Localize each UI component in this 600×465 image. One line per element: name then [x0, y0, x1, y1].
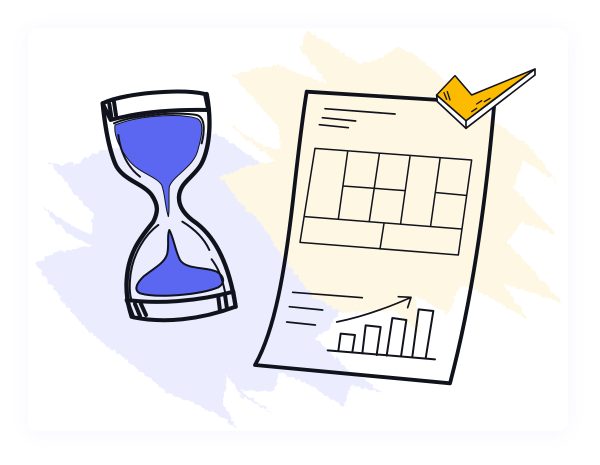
hourglass top sand	[115, 116, 202, 217]
brush stroke: purple	[35, 133, 383, 428]
table	[300, 148, 472, 255]
icon: hourglass	[103, 92, 236, 320]
hourglass top cap	[103, 92, 208, 120]
document bottom text lines and chart	[287, 292, 435, 359]
brush stroke: yellow	[220, 30, 563, 335]
document top text lines and table	[300, 109, 472, 255]
card background	[28, 28, 568, 431]
hourglass bottom cap	[127, 292, 236, 320]
heading lines	[319, 109, 395, 128]
trend arrow	[337, 297, 411, 322]
document	[255, 69, 535, 383]
hourglass glass outline	[103, 94, 236, 317]
check mark highlights	[444, 92, 490, 112]
check mark top face	[437, 69, 535, 121]
caption lines	[287, 292, 362, 325]
icon: check mark	[437, 69, 535, 128]
bar chart	[328, 309, 435, 359]
check mark side faces	[437, 69, 535, 128]
hourglass inner glass lines	[114, 114, 225, 300]
hourglass bottom sand	[136, 230, 223, 296]
document outline	[255, 92, 494, 383]
